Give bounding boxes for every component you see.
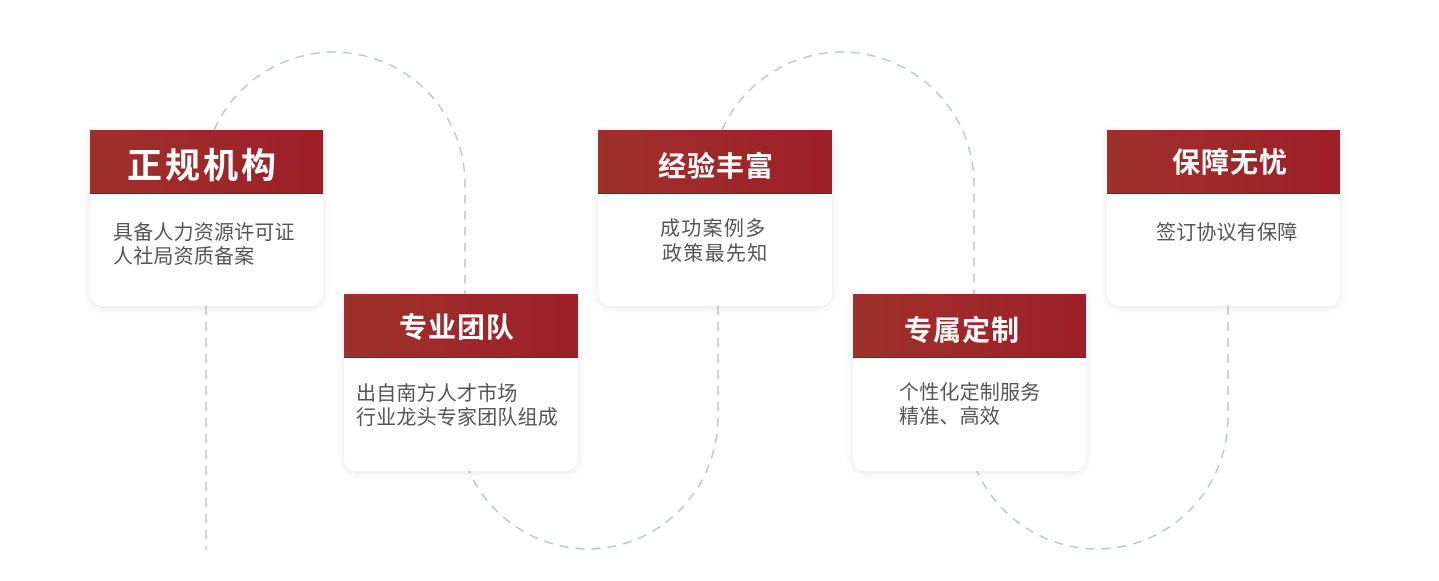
header: 经验丰富 xyxy=(598,130,832,194)
panel: 专属定制 xyxy=(853,294,1086,471)
text: 专属定制 description: 个性化定制服务 xyxy=(899,382,1040,404)
header: 专业团队: 专业团队 xyxy=(399,312,515,343)
text: 经验丰富 description: 成功案例多 xyxy=(660,218,766,240)
panel: 保障无忧 xyxy=(1107,130,1340,306)
text: 经验丰富 description: 政策最先知 xyxy=(662,243,768,265)
header: 专属定制 xyxy=(853,294,1086,358)
header: 经验丰富: 经验丰富 xyxy=(658,151,774,182)
header: 保障无忧 xyxy=(1107,130,1340,194)
panel: 正规机构 xyxy=(90,130,323,306)
text: 经验丰富 description xyxy=(660,218,768,265)
header: 专业团队 xyxy=(344,294,578,358)
text: 正规机构 description xyxy=(113,222,295,268)
header: 正规机构 xyxy=(90,130,323,194)
panel: 专业团队 xyxy=(344,294,578,471)
header: 正规机构: 正规机构 xyxy=(127,147,279,186)
header: 保障无忧: 保障无忧 xyxy=(1172,147,1288,178)
panel: 经验丰富 xyxy=(598,130,832,306)
text: 专属定制 description: 精准、高效 xyxy=(899,406,1000,428)
text: 专业团队 description: 行业龙头专家团队组成 xyxy=(356,407,558,429)
text: 专业团队 description: 出自南方人才市场 xyxy=(356,383,518,405)
text: 专属定制 description xyxy=(899,382,1040,428)
text: 正规机构 description: 人社局资质备案 xyxy=(113,246,254,268)
header: 专属定制: 专属定制 xyxy=(904,315,1020,346)
text: 正规机构 description: 具备人力资源许可证 xyxy=(113,222,295,244)
text: 专业团队 description xyxy=(356,382,558,429)
text: 保障无忧 description: 签订协议有保障 xyxy=(1156,222,1297,244)
